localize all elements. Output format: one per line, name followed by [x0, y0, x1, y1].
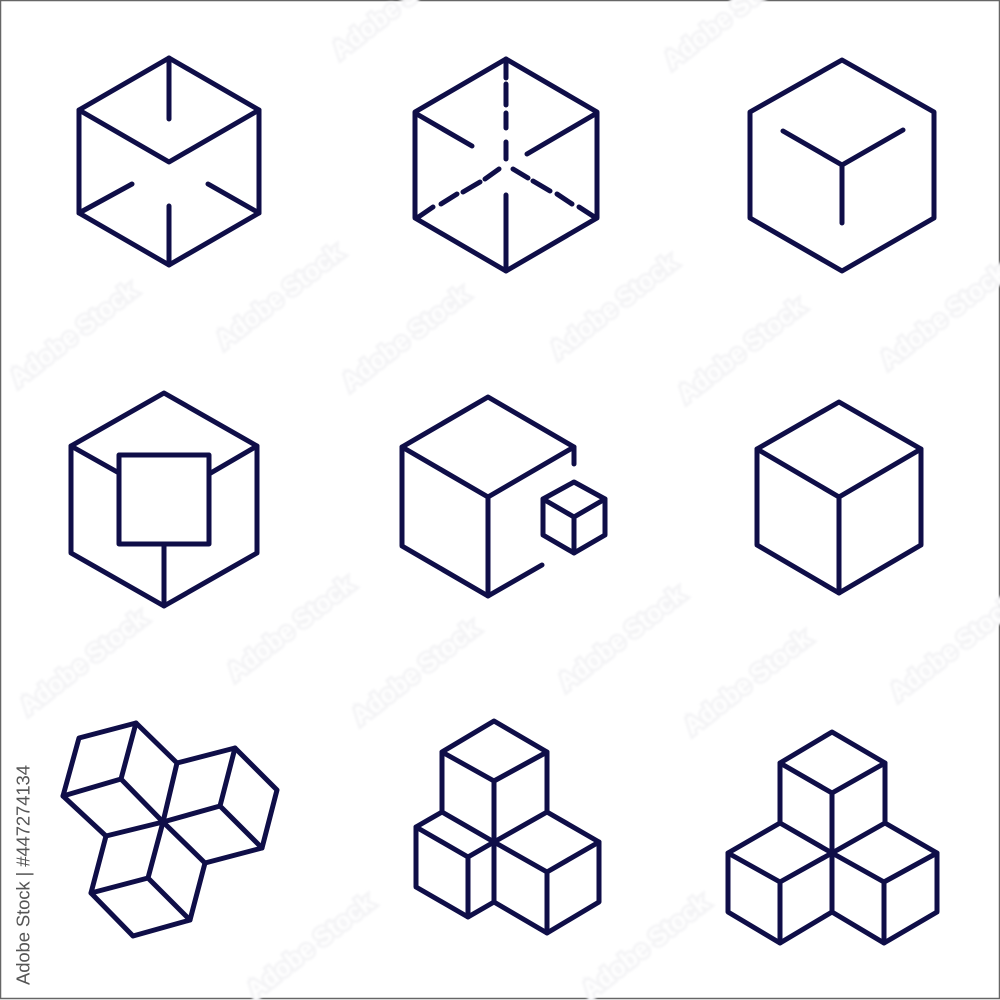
icon: hexagon cube with dashed lines	[415, 59, 597, 271]
icon: small cube	[543, 482, 605, 553]
text: Adobe Stock	[672, 293, 810, 409]
icon: three stacked cubes with smaller left cube	[416, 721, 599, 933]
icon: hexagon with Y inside	[750, 60, 934, 271]
text: Adobe Stock	[4, 277, 142, 393]
text: Adobe Stock	[14, 605, 152, 721]
icon: large open cube with small cube	[402, 397, 605, 596]
text: Adobe Stock	[552, 581, 690, 697]
text: Adobe Stock	[678, 625, 816, 741]
stock id text: Adobe Stock | #447274134	[12, 765, 34, 985]
text: Adobe Stock	[336, 281, 474, 397]
text: Adobe Stock	[346, 615, 484, 731]
text: Adobe Stock	[221, 571, 359, 687]
icon: hexagon cube with inward ticks	[79, 58, 259, 265]
text: Adobe Stock	[544, 249, 682, 365]
icon: three stacked equal cubes	[728, 732, 937, 943]
text: Adobe Stock	[210, 239, 348, 355]
icon: plain isometric cube	[757, 402, 921, 593]
icon: three rotated cubes	[63, 723, 277, 936]
icon: hexagon cube with square front	[71, 393, 257, 606]
